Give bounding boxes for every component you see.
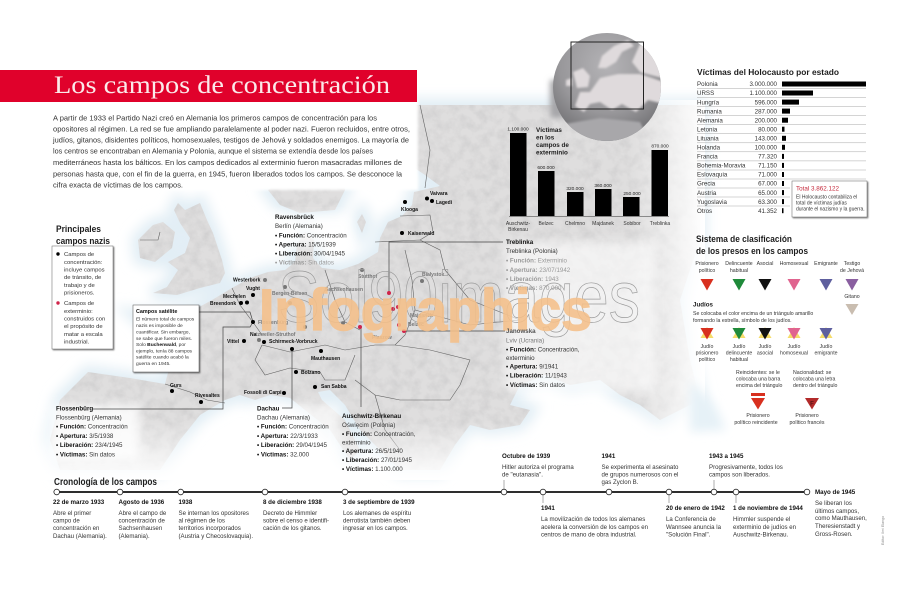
chart values: 360.000	[594, 183, 612, 189]
french prisoner triangle: F	[810, 402, 814, 408]
jews heading and note: formando la estrella, símbolo de los judíos.	[693, 318, 792, 324]
camp panel: Flossenbürg: • Apertura: 3/5/1938	[56, 433, 114, 440]
intro text: cifra exacta de víctimas de los campos.	[53, 180, 183, 190]
event: 20 January 1942: La Conferencia de	[666, 516, 716, 523]
camp names: Breendonk	[210, 301, 236, 307]
camp panel: Ravensbrück	[275, 214, 347, 266]
camp names: Gurs	[170, 383, 182, 389]
camp names: Rivesaltes	[195, 393, 220, 399]
camp names: Sachsenhausen	[325, 287, 363, 293]
event: 3 September 1939: Los alemanes de espíritu	[343, 510, 411, 517]
camp panel: Dachau: • Víctimas: 32.000	[257, 452, 310, 458]
map of Europe	[0, 100, 726, 480]
legend heading	[56, 224, 110, 247]
star badges	[700, 327, 832, 340]
callout: total victims	[792, 181, 867, 217]
leader lines	[92, 242, 505, 409]
row labels: Lituania	[697, 136, 719, 142]
bar chart: victims in extermination camps	[506, 126, 670, 233]
event: 8 December 1938: cación de los gitanos.	[263, 525, 322, 532]
legend text: concentración:	[64, 260, 103, 266]
camp panel: Dachau: Dachau (Alemania)	[257, 414, 310, 422]
event: May 1945	[815, 489, 867, 538]
camp panel: Janowska: exterminio	[506, 355, 535, 362]
row values: 3.000.000	[749, 81, 778, 88]
star labels	[696, 344, 838, 363]
nationality note	[793, 370, 838, 389]
event: 3 September 1939	[343, 499, 415, 532]
triangle labels: Testigo	[844, 261, 860, 267]
event: May 1945: Theresienstadt y	[815, 523, 861, 530]
camp panel: Dachau: Dachau	[257, 406, 280, 412]
triangle labels: de Jehová	[840, 268, 864, 274]
event: 8 December 1938: 8 de diciembre 1938	[263, 499, 322, 506]
callout: satellite camps	[133, 305, 199, 372]
chart categories: Treblinka	[650, 221, 670, 227]
camp panel: Auschwitz-Birkenau: • Liberación: 27/01/1945	[342, 457, 412, 464]
table heading: Víctimas del Holocausto por estado	[697, 67, 839, 77]
row labels: Otros	[697, 208, 712, 215]
event: May 1945: últimos campos,	[815, 508, 859, 515]
triangle labels: Homosexual	[780, 261, 808, 267]
event: 22 March 1933: Abre el primer	[53, 510, 91, 517]
event: 8 December 1938: Decreto de Himmler	[263, 510, 317, 517]
camp panel: Flossenbürg: • Función: Concentración	[56, 424, 128, 430]
camp names: Plaszow	[372, 335, 392, 341]
camp panel: Auschwitz-Birkenau: • Apertura: 26/5/1940	[342, 448, 403, 455]
badge captions: Prisionero	[795, 413, 819, 419]
chart categories	[506, 221, 670, 233]
row labels: Rumania	[697, 108, 722, 115]
chart values: 320.000	[566, 186, 584, 192]
table: victims by state	[697, 67, 866, 215]
event: October 1939	[502, 453, 574, 478]
event: 22 March 1933: Dachau (Alemania).	[53, 533, 107, 540]
event: 1941 lower: centros de mano de obra industrial.	[541, 532, 637, 538]
camp names: Na	[250, 332, 257, 338]
row labels: Polonia	[697, 81, 718, 88]
event: 1938: (Austria y Checoslovaquia).	[178, 533, 253, 540]
badge captions: político reincidente	[734, 420, 778, 426]
event: August 1936: concentración de	[118, 518, 166, 525]
event: 1943 to 1945: 1943 a 1945	[709, 453, 744, 460]
camp panel: Dachau	[257, 406, 329, 458]
camp panel: Ravensbrück: • Liberación: 30/04/1945	[275, 250, 345, 258]
triangle labels: político	[699, 268, 715, 274]
chart bars	[510, 133, 668, 216]
camp panel: Treblinka: • Apertura: 23/07/1942	[506, 267, 571, 274]
event: 1941 lower: 1941	[541, 505, 555, 512]
row labels: Alemania	[697, 117, 723, 124]
camp names: Kaiserwald	[408, 231, 434, 237]
row values: 63.300	[758, 199, 778, 206]
event: August 1936	[118, 499, 167, 540]
classification heading: de los presos en los campos	[696, 246, 808, 256]
intro text: los centros se encontraban en Alemania y Polonia, aunque el sistema se extendía desde los países	[53, 147, 373, 156]
event: August 1936: Agosto de 1936	[118, 499, 165, 506]
camp names: Fossoli di Carpi	[244, 390, 282, 396]
event: May 1945: Mayo de 1945	[815, 489, 856, 496]
jews heading and note: Judíos	[693, 302, 713, 308]
star labels: político	[699, 357, 715, 363]
camp panel: Janowska: Janowska	[506, 328, 536, 335]
camp panel: Treblinka: Treblinka (Polonia)	[506, 248, 558, 255]
camp panel: Dachau: • Apertura: 22/3/1933	[257, 433, 318, 440]
event: 1941 upper: 1941	[602, 453, 616, 460]
timeline	[53, 453, 867, 540]
event: May 1945: Gross-Rosen.	[815, 531, 853, 538]
event: May 1945: como Mauthausen,	[815, 515, 867, 522]
legend heading: Principales	[56, 224, 101, 235]
camp panel: Auschwitz-Birkenau: • Víctimas: 1.100.000	[342, 466, 403, 473]
triangle labels: Delincuente	[725, 261, 753, 267]
camp names: Westerbork	[233, 278, 261, 284]
row values: 71.150	[758, 163, 778, 170]
row values: 41.352	[758, 208, 778, 215]
triangle labels: Emigrante	[814, 261, 838, 267]
repeat offender note: Reincidentes: se le	[736, 370, 780, 376]
legend text: exterminio:	[64, 309, 93, 315]
event: 20 January 1942: 20 de enero de 1942	[666, 505, 725, 512]
intro text: opositores al régimen. La red se fue ampliando paralelamente al poder nazi. Fueron recluidos, entre otros,	[53, 124, 410, 134]
legend heading: campos nazis	[56, 236, 110, 247]
event: 1938: Se internan los opositores	[178, 510, 249, 517]
camp panel: Janowska: • Liberación: 11/1943	[506, 372, 567, 380]
row values: 596.000	[755, 99, 778, 106]
camp panel: Flossenbürg: • Liberación: 23/4/1945	[56, 442, 123, 449]
event: 1943 to 1945: campos son liberados.	[709, 472, 770, 478]
camp panel: Treblinka: • Liberación: 1943	[506, 276, 559, 283]
camp panel: Flossenbürg: Flossenbürg	[56, 406, 93, 412]
legend text	[64, 252, 105, 346]
extermination camps	[358, 291, 406, 333]
badge captions: Prisionero	[746, 413, 770, 419]
camp panel: Auschwitz-Birkenau: Oświęcim (Polonia)	[342, 422, 395, 429]
star labels: homosexual	[780, 350, 808, 356]
event: 1941 upper: gas Zyclon B.	[602, 479, 639, 486]
repeat offender note: colocaba una barra	[736, 376, 781, 382]
event: 1 November 1944: 1 de noviembre de 1944	[733, 505, 803, 512]
callout: satellite camps: satélite cuando acabó la	[136, 354, 189, 360]
chart title: en los	[536, 134, 555, 142]
callout: total victims: Total 3.862.122	[796, 186, 840, 192]
legend text: matar a escala	[64, 332, 103, 338]
row labels: Letonia	[697, 126, 718, 133]
legend text: incluye campos	[64, 268, 105, 274]
legend text: construidos con	[64, 316, 105, 322]
callout: satellite camps: cuantificar. Sin embargo,	[136, 329, 190, 335]
event: 1 November 1944: Auschwitz-Birkenau.	[733, 532, 789, 538]
chart categories: Sobibor	[623, 221, 641, 227]
legend text: de tránsito, de	[64, 275, 102, 281]
event: 8 December 1938: sobre el censo e identifi-	[263, 518, 329, 525]
event: 22 March 1933: 22 de marzo 1933	[53, 499, 105, 506]
row values: 100.000	[755, 144, 778, 152]
camp markers	[170, 196, 434, 404]
camp panel: Treblinka	[506, 239, 571, 292]
nationality note: colocaba una letra	[793, 376, 836, 382]
event: 22 March 1933	[53, 499, 107, 540]
triangle labels: habitual	[730, 268, 748, 274]
event: October 1939: Hitler autoriza el programa	[502, 464, 574, 471]
row values: 65.000	[758, 190, 778, 197]
event: 1 November 1944: exterminio de judíos en	[733, 524, 796, 531]
callout: satellite camps: Campos satélite	[136, 309, 177, 315]
star labels: Judío	[733, 344, 745, 350]
camp panel: Treblinka: • Víctimas: 870.000	[506, 285, 562, 292]
legend text: Campos de	[64, 252, 95, 258]
camp panel: Ravensbrück: • Función: Concentración	[275, 232, 347, 239]
concentration camps	[170, 196, 434, 404]
row labels	[697, 81, 746, 215]
camp names: tzweiler-Struthof	[256, 332, 296, 338]
callout: satellite camps: guerra en 1945.	[136, 361, 171, 367]
camp names: Schirmeck-Vorbruck	[269, 339, 318, 345]
row bars	[782, 82, 866, 213]
timeline heading: Cronología de los campos	[54, 477, 157, 488]
camp names: Bergen-Belsen	[272, 291, 307, 297]
credit: Editor: Ilmi Elango	[881, 516, 885, 545]
event: 3 September 1939: 3 de septiembre de 1939	[343, 499, 415, 506]
nationality note: dentro del triángulo	[793, 383, 838, 389]
badge captions	[734, 413, 825, 426]
callout: total victims: El Holocausto contabiliza el	[796, 194, 857, 200]
camp names: Bialystok	[422, 272, 444, 278]
star labels: prisionero	[696, 350, 719, 356]
camp panel: Janowska: • Víctimas: Sin datos	[506, 382, 565, 389]
event: 1 November 1944: Himmler suspende el	[733, 516, 790, 523]
event: May 1945: Se liberan los	[815, 500, 852, 507]
event: 1941 upper: de grupos numerosos con el	[602, 472, 678, 478]
callout: satellite camps: El número total de campos	[136, 316, 195, 322]
event: October 1939: Octubre de 1939	[502, 453, 551, 460]
camp panel: Ravensbrück: • Apertura: 15/5/1939	[275, 242, 336, 248]
star labels: Judío	[701, 344, 713, 350]
row labels: Austria	[697, 190, 717, 197]
chart categories: Auschwitz-	[506, 221, 530, 227]
intro text: personas hasta que, con el fin de la guerra, en 1945, fueron liberados todos los campos. Se desconoce la	[53, 169, 403, 178]
camp panel: Janowska: • Apertura: 9/1941	[506, 364, 559, 370]
event: August 1936: Abre el campo de	[118, 510, 167, 517]
row labels: Bohemia-Moravia	[697, 163, 746, 170]
watermark: Sol90images	[278, 258, 640, 338]
legend text: el propósito de	[64, 324, 103, 330]
triangle labels: Asocial	[757, 261, 773, 267]
chart title: exterminio	[536, 150, 568, 156]
camp panel: Flossenbürg: • Víctimas: Sin datos	[56, 452, 115, 458]
classification system of prisoners	[693, 234, 864, 426]
star labels: Judío	[820, 344, 832, 350]
legend text: trabajo y de	[64, 283, 96, 289]
chart categories: Belzec	[538, 221, 554, 227]
triangles	[700, 279, 858, 315]
camp panel: Ravensbrück: Berlín (Alemania)	[275, 223, 323, 230]
chart title	[536, 127, 569, 156]
camp names: Vught	[246, 286, 260, 292]
chart values	[507, 126, 669, 197]
row values	[749, 81, 778, 215]
camp names: San Sabba	[321, 384, 347, 390]
event: 1938: al régimen de los	[178, 518, 225, 525]
callout: satellite camps: ejemplo, tenía 88 campos	[136, 348, 193, 354]
camp names: Lagedi	[436, 200, 453, 206]
camp panel: Flossenbürg	[56, 406, 128, 458]
row values: 200.000	[755, 117, 778, 124]
intro text: judíos, gitanos, disidentes políticos, homosexuales, testigos de Jehová y soldados enemigos. La mayoría de	[52, 136, 409, 144]
timeline axis	[54, 480, 810, 503]
chart title: Víctimas	[536, 127, 562, 134]
chart categories: Chelmno	[565, 221, 585, 227]
camp names: Stutthof	[358, 274, 377, 280]
repeat offender triangle	[751, 393, 765, 410]
chart values: 1.100.000	[507, 126, 529, 132]
row labels: Grecia	[697, 181, 716, 188]
legend: main nazi camps	[52, 224, 113, 349]
row values: 1.100.000	[749, 90, 778, 97]
row values: 71.000	[758, 172, 778, 179]
chart values: 250.000	[623, 191, 641, 197]
badge captions: político francés	[790, 420, 825, 426]
jews heading and note	[693, 302, 813, 324]
chart values: 870.000	[651, 144, 669, 150]
intro text	[52, 114, 410, 190]
star labels: delincuente	[726, 350, 752, 356]
repeat offender note: encima del triángulo	[736, 383, 783, 389]
camp panel: Treblinka: Treblinka	[506, 239, 534, 246]
camp names: Vaivara	[430, 191, 448, 197]
legend text: prisioneros.	[64, 290, 95, 296]
callout: satellite camps: se sabe que fueron miles.	[136, 336, 192, 342]
callout: satellite camps: Solo Buchenwald, por	[136, 342, 186, 348]
camp names: Majdanek	[410, 313, 433, 319]
star labels: Judío	[788, 344, 800, 350]
star labels: Judío	[759, 344, 771, 350]
event: August 1936: Sachsenhausen	[118, 525, 162, 532]
event: 1938: territorios incorporados	[178, 525, 241, 532]
event: 1941 lower	[541, 505, 648, 538]
camp panel: Dachau: • Función: Concentración	[257, 424, 329, 430]
row labels: URSS	[697, 90, 714, 97]
event: 3 September 1939: derrotista también deben	[343, 518, 410, 525]
event: 22 March 1933: campo de	[53, 518, 80, 525]
camp panel: Treblinka: • Función: Exterminio	[506, 258, 568, 264]
event: August 1936: (Alemania).	[118, 533, 150, 540]
event: 20 January 1942: Wannsee anuncia la	[666, 524, 722, 531]
event: 20 January 1942	[666, 505, 725, 538]
event: 1938	[178, 499, 253, 540]
french prisoner triangle	[805, 398, 819, 410]
faded camps	[257, 268, 424, 342]
camp panel: Auschwitz-Birkenau	[342, 413, 416, 473]
event: 1943 to 1945	[709, 453, 783, 478]
camp panel: Auschwitz-Birkenau: Auschwitz-Birkenau	[342, 413, 401, 420]
row labels: Holanda	[697, 144, 721, 152]
callout: total victims: total de víctimas judías	[796, 200, 847, 206]
camp panel: Janowska	[506, 328, 580, 389]
star labels: emigrante	[814, 350, 838, 356]
camp names	[170, 191, 453, 399]
callout: satellite camps: nazis es imposible de	[136, 323, 183, 329]
classification heading: Sistema de clasificación	[696, 234, 792, 244]
row values: 287.000	[755, 108, 778, 115]
jews heading and note: Se colocaba el color encima de un triángulo amarillo	[693, 311, 813, 317]
camp names: Bolzano	[301, 370, 320, 376]
row labels: Yugoslavia	[697, 199, 727, 206]
row values: 80.000	[758, 126, 778, 133]
row values: 67.000	[758, 181, 778, 188]
title banner	[0, 70, 417, 102]
camp panel: Auschwitz-Birkenau: • Función: Concentración,	[342, 431, 416, 438]
event: 8 December 1938	[263, 499, 329, 532]
camp panel: Flossenbürg: Flossenbürg (Alemania)	[56, 414, 122, 422]
camp names: Vittel	[227, 339, 240, 345]
camp panel: Dachau: • Liberación: 29/04/1945	[257, 442, 327, 449]
camp names: Mauthausen	[311, 356, 340, 362]
row values: 77.320	[758, 154, 778, 161]
triangle labels: Prisionero	[695, 261, 719, 267]
event: 1941 lower: La movilización de todos los alemanes	[541, 516, 645, 523]
star labels: habitual	[730, 357, 748, 363]
camp panel: Janowska: Lviv (Ucrania)	[506, 338, 544, 344]
row labels: Francia	[697, 154, 718, 161]
camp panel: Ravensbrück: Ravensbrück	[275, 214, 314, 221]
event: 1941 upper	[602, 453, 679, 486]
locator globe	[550, 33, 664, 142]
row labels: Eslovaquia	[697, 172, 728, 179]
classification heading	[696, 234, 808, 256]
star labels: asocial	[757, 350, 773, 356]
legend text: Campos de	[64, 301, 95, 307]
row values: 143.000	[755, 136, 778, 142]
camp panel: Ravensbrück: • Víctimas: Sin datos	[275, 260, 334, 266]
title banner: Los campos de concentración	[54, 72, 391, 99]
camp panel: Auschwitz-Birkenau: exterminio	[342, 440, 371, 446]
event: 1943 to 1945: Progresivamente, todos los	[709, 464, 783, 471]
camp names: Belzec	[408, 322, 424, 328]
chart categories: Birkenau	[508, 227, 528, 233]
camp names: Mechelen	[223, 294, 246, 300]
intro text: A partir de 1933 el Partido Nazi creó en Alemania los primeros campos de concentración para los	[53, 114, 377, 122]
event: 1 November 1944	[733, 505, 803, 538]
triangle labels: Gitano	[844, 294, 860, 300]
event: October 1939: de "eutanasia".	[502, 472, 543, 478]
watermark: Infographics	[259, 278, 592, 343]
event: 3 September 1939: ingresar en los campos.	[343, 525, 408, 532]
event: 1938: 1938	[178, 499, 193, 506]
intro text: mediterráneos hasta los bálticos. En los campos dedicados al exterminio fueron masacradas millones de	[53, 158, 402, 167]
triangle labels	[695, 261, 864, 300]
camp panel: Janowska: • Función: Concentración,	[506, 346, 580, 354]
chart values: 600.000	[537, 165, 555, 171]
legend text: industrial.	[64, 340, 90, 346]
nationality note: Nacionalidad: se	[793, 370, 831, 376]
callout: total victims: durante el nazismo y la guerra.	[796, 206, 865, 212]
event: 20 January 1942: "Solución Final".	[666, 532, 711, 538]
event: 22 March 1933: concentración en	[53, 525, 99, 532]
event: 1941 upper: Se experimenta el asesinato	[602, 464, 679, 471]
camp names: Klooga	[401, 207, 418, 213]
camp names: Flossenbürg	[258, 320, 288, 326]
row labels: Hungría	[697, 99, 720, 106]
chart title: campos de	[536, 142, 569, 149]
event: 1941 lower: acelera la conversión de los campos en	[541, 524, 648, 531]
repeat offender note	[736, 370, 783, 389]
chart categories: Majdanek	[592, 221, 614, 227]
